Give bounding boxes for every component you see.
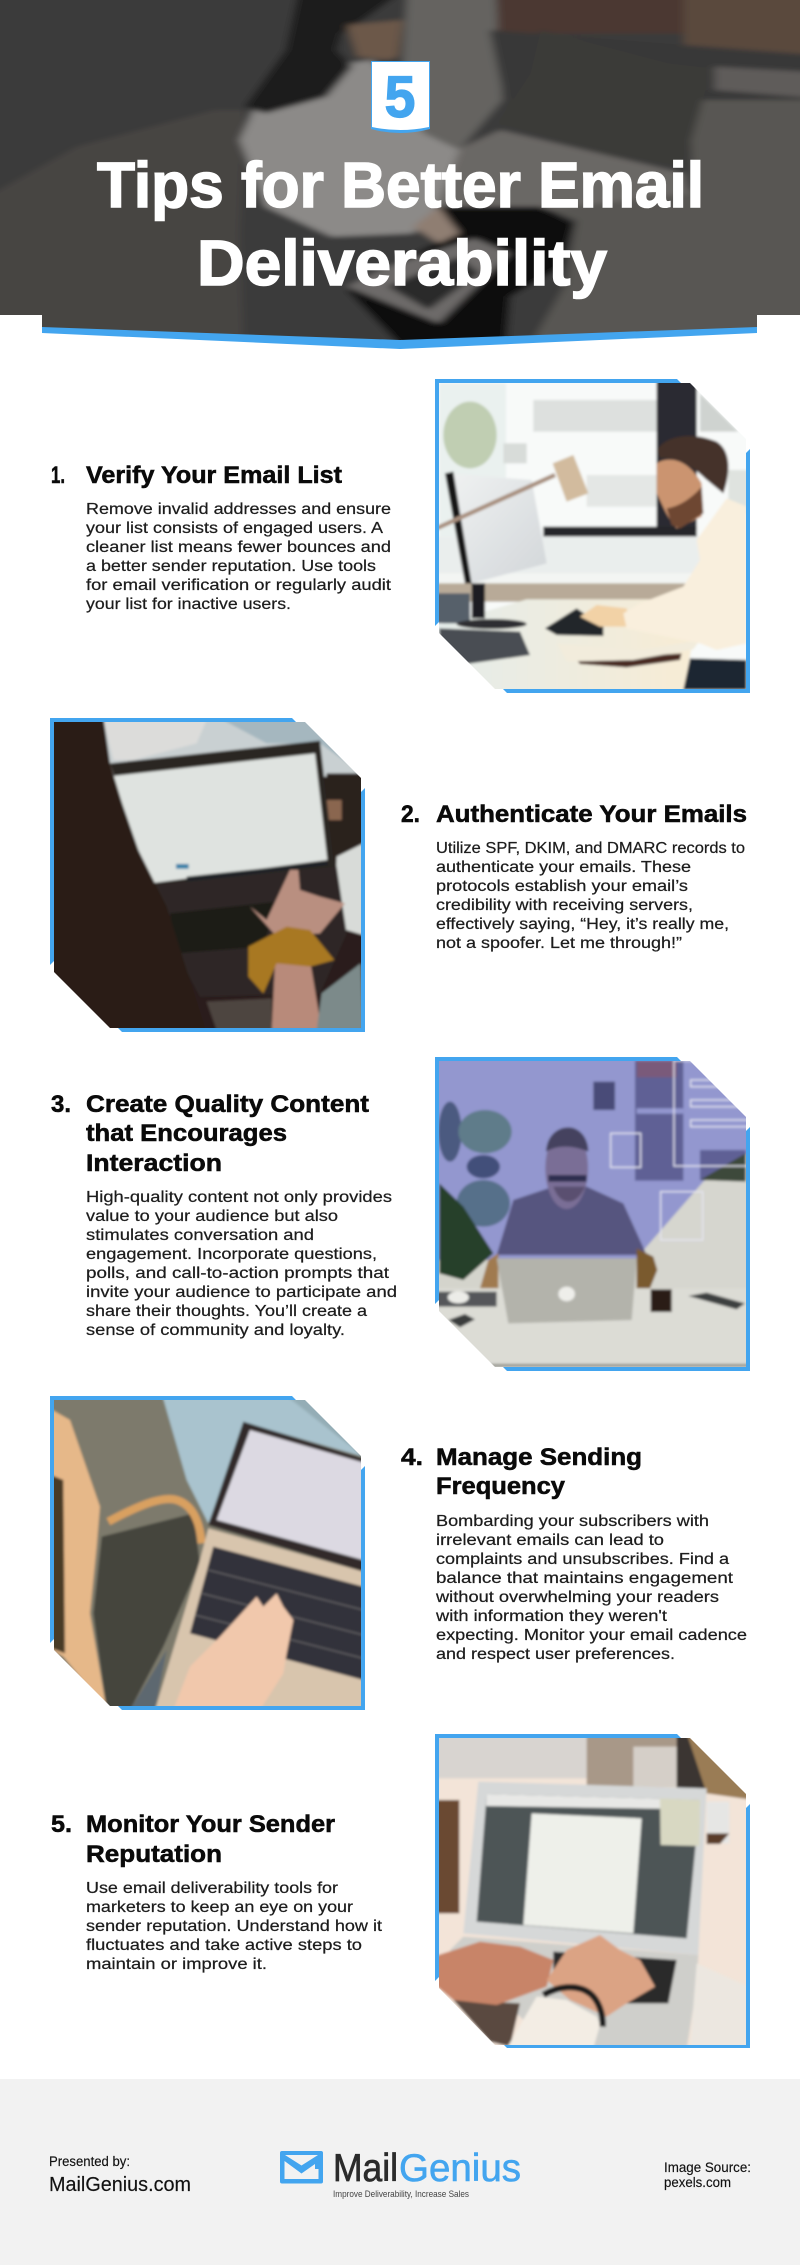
- tip 3 body text: polls, and call-to-action prompts that: [86, 1265, 390, 1282]
- tip 5 heading: Monitor Your Sender: [86, 1811, 335, 1838]
- image: man smiling at desktop computer: [433, 377, 753, 697]
- tip 4 heading: Frequency: [436, 1473, 566, 1500]
- image: hand on laptop keyboard beside tan bag: [47, 1393, 367, 1713]
- tip 5 body text: fluctuates and take active steps to: [86, 1937, 362, 1954]
- tip 2 body text: not a spoofer. Let me through!”: [436, 935, 682, 952]
- tip 5 body text: sender reputation. Understand how it: [86, 1918, 383, 1935]
- tip 3 body text: value to your audience but also: [86, 1208, 338, 1225]
- tip 3 body text: High-quality content not only provides: [86, 1189, 392, 1206]
- tip 3 body text: sense of community and loyalty.: [86, 1322, 345, 1339]
- tip 2 body text: credibility with receiving servers,: [436, 897, 693, 914]
- header banner with photo: [0, 0, 800, 380]
- tip 1 number: 1.: [51, 462, 65, 489]
- tip 2 number: 2.: [401, 801, 420, 828]
- tip 4 body text: balance that maintains engagement: [436, 1570, 734, 1587]
- panel: tip 1: [51, 377, 753, 697]
- presented by credit: MailGenius.com: [49, 2174, 191, 2196]
- logo: MailGenius: [280, 2147, 521, 2200]
- tip 3 number: 3.: [51, 1091, 71, 1118]
- logo: MailGenius: Mail: [333, 2147, 398, 2190]
- tip 3 body text: invite your audience to participate and: [86, 1284, 397, 1301]
- tip 2 body text: Utilize SPF, DKIM, and DMARC records to: [436, 840, 745, 857]
- panel: tip 4: [47, 1393, 747, 1713]
- panel: footer: [0, 2079, 800, 2265]
- presented by credit: Presented by:: [49, 2154, 130, 2169]
- image: man at laptop with purple overlay: [433, 1053, 754, 1373]
- tip 4 body text: Bombarding your subscribers with: [436, 1513, 709, 1530]
- tip 2 body text: [436, 840, 745, 952]
- title: Deliverability: [197, 227, 607, 299]
- tip 5 number: 5.: [51, 1811, 72, 1838]
- header chevron accent: [42, 327, 757, 349]
- tip 3 heading: Interaction: [86, 1150, 222, 1177]
- image: hands typing on silver laptop: [433, 1733, 753, 2053]
- icon: envelope: [280, 2151, 323, 2184]
- tip 1 body text: Remove invalid addresses and ensure: [86, 501, 391, 518]
- presented by credit: [49, 2154, 191, 2196]
- tip 4 body text: without overwhelming your readers: [435, 1589, 719, 1606]
- tip 1 body text: for email verification or regularly audit: [86, 577, 392, 594]
- tip 1 body text: your list consists of engaged users. A: [86, 520, 384, 537]
- tip 2 body text: effectively saying, “Hey, it’s really me,: [436, 916, 729, 933]
- tip 4 body text: and respect user preferences.: [436, 1646, 675, 1663]
- tip 5 body text: maintain or improve it.: [86, 1956, 267, 1973]
- tip 3 body text: engagement. Incorporate questions,: [86, 1246, 377, 1263]
- tip 1 body text: a better sender reputation. Use tools: [86, 558, 376, 575]
- tip 2 heading: Authenticate Your Emails: [436, 801, 747, 828]
- tip 4 body text: expecting. Monitor your email cadence: [436, 1627, 747, 1644]
- tip 1 body text: your list for inactive users.: [86, 596, 291, 613]
- panel: tip 3: [51, 1053, 754, 1373]
- tip 3 body text: [86, 1189, 397, 1339]
- tip 4 body text: [435, 1513, 747, 1663]
- tip 3 body text: stimulates conversation and: [86, 1227, 314, 1244]
- tip 1 heading: Verify Your Email List: [86, 462, 342, 489]
- image: woman typing on dark laptop: [47, 717, 367, 1037]
- image source credit: pexels.com: [664, 2174, 731, 2190]
- tip 3 heading: Create Quality Content: [86, 1091, 369, 1118]
- tip 5 heading: [86, 1811, 335, 1868]
- tip 5 body text: [86, 1880, 383, 1973]
- tip 5 body text: marketers to keep an eye on your: [86, 1899, 353, 1916]
- tip 3 body text: share their thoughts. You’ll create a: [86, 1303, 367, 1320]
- icon: number badge: 5: [384, 65, 416, 130]
- tip 2 body text: protocols establish your email’s: [436, 878, 688, 895]
- image source credit: [664, 2159, 751, 2190]
- logo: MailGenius: Genius: [399, 2147, 521, 2190]
- tip 4 body text: with information they weren't: [435, 1608, 668, 1625]
- header photo: woman with laptop on sofa: [0, 0, 800, 340]
- icon: number badge: [371, 61, 430, 133]
- panel: tip 2: [47, 717, 747, 1037]
- panel: tip 5: [51, 1733, 753, 2053]
- tip 4 heading: Manage Sending: [436, 1444, 642, 1471]
- tip 5 heading: Reputation: [86, 1841, 222, 1868]
- tip 4 number: 4.: [401, 1444, 423, 1471]
- tip 2 body text: authenticate your emails. These: [436, 859, 691, 876]
- tip 3 heading: [86, 1091, 369, 1177]
- title: Tips for Better Email: [97, 149, 704, 221]
- tip 4 body text: irrelevant emails can lead to: [436, 1532, 664, 1549]
- tip 4 heading: [436, 1444, 642, 1500]
- tip 4 body text: complaints and unsubscribes. Find a: [436, 1551, 729, 1568]
- image source credit: Image Source:: [664, 2159, 751, 2175]
- title: [97, 149, 704, 299]
- tip 1 body text: [86, 501, 392, 613]
- tip 3 heading: that Encourages: [86, 1120, 287, 1147]
- logo: MailGenius: Improve Deliverability, Increase Sales: [333, 2189, 469, 2200]
- tip 1 body text: cleaner list means fewer bounces and: [86, 539, 391, 556]
- tip 5 body text: Use email deliverability tools for: [86, 1880, 338, 1897]
